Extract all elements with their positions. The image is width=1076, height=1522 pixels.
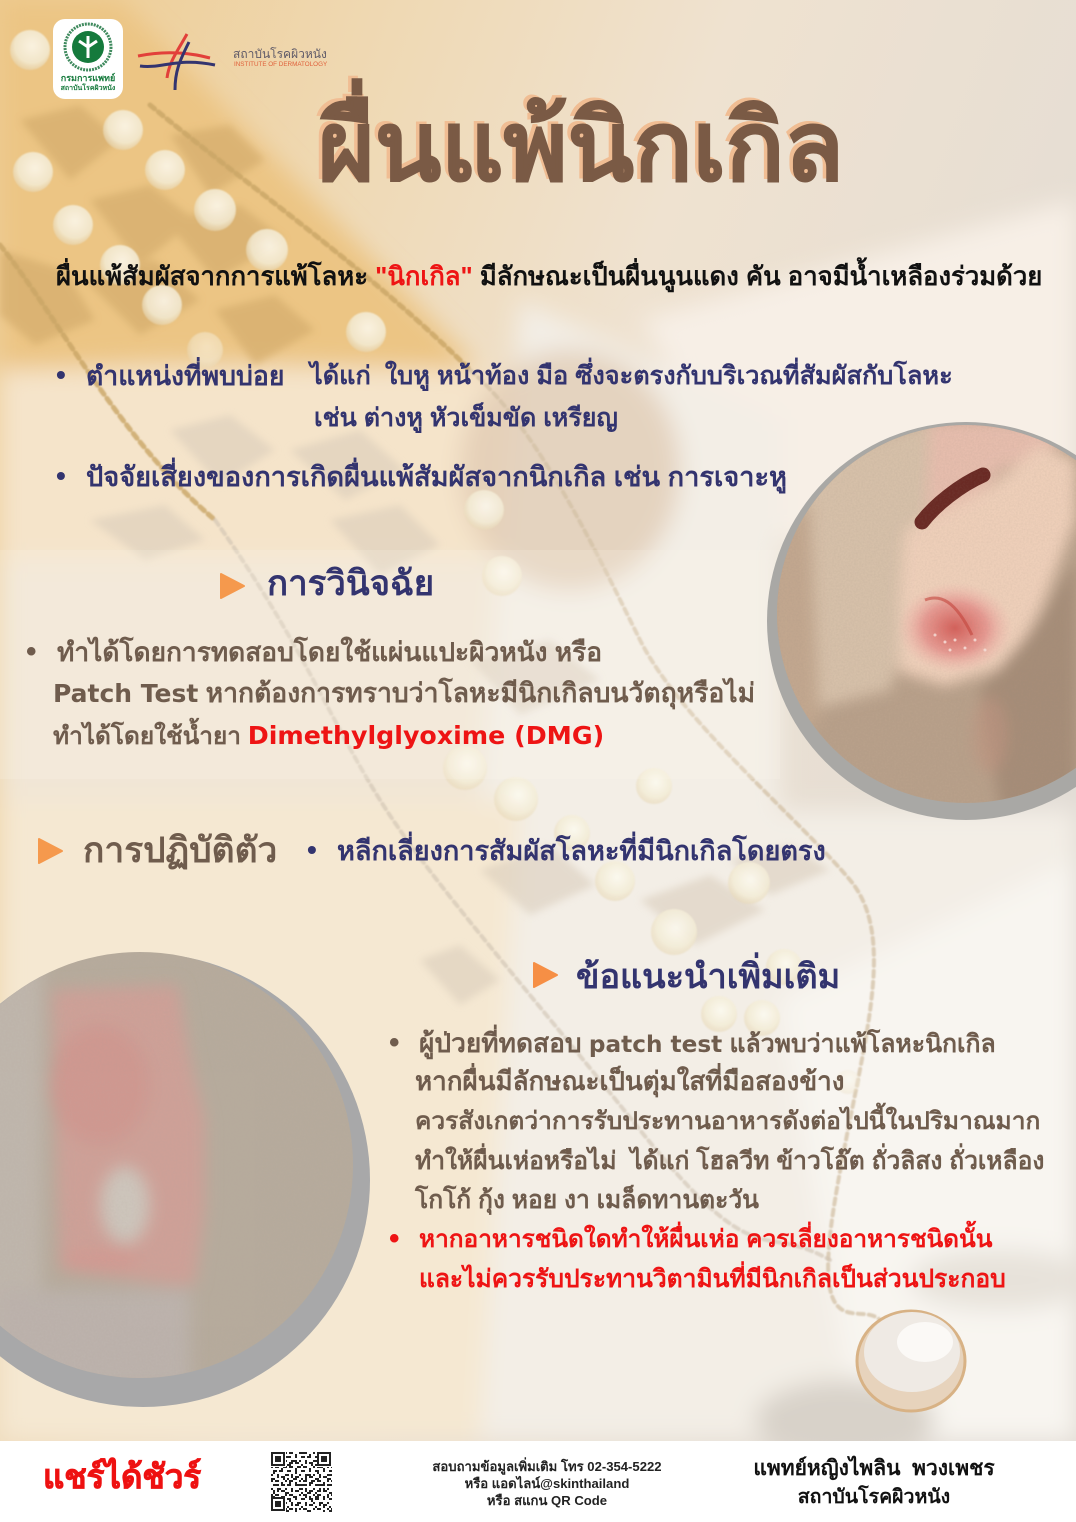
- bullet list: locations and risk factors: [56, 357, 953, 494]
- practice text: •: [307, 834, 317, 865]
- diagnosis panel band: [0, 550, 780, 779]
- photo: earlobe rash: [767, 422, 1076, 820]
- bullet list: locations and risk factors: •: [56, 460, 66, 491]
- pearls: [10, 30, 860, 1094]
- footer bar: [0, 1441, 1076, 1522]
- icon: arrow: [220, 573, 245, 599]
- bullet list: locations and risk factors: •: [56, 359, 66, 390]
- logo: department of medical services: สถาบันโรคผิวหนัง: [61, 85, 115, 92]
- heading: practice: การปฏิบัติตัว: [83, 831, 277, 870]
- share slogan: แชร์ได้ชัวร์: [43, 1458, 201, 1495]
- advice text: ผู้ป่วยที่ทดสอบ patch test แล้วพบว่าแพ้โลหะนิกเกิล: [419, 1028, 996, 1058]
- logo: institute of dermatology: สถาบันโรคผิวหนัง: [233, 47, 327, 61]
- diagnosis panel band: ทำได้โดยการทดสอบโดยใช้แผ่นแปะผิวหนัง หรือ: [57, 637, 602, 667]
- contact text: สอบถามข้อมูลเพิ่มเติม โทร 02-354-5222: [432, 1459, 662, 1474]
- advice text: หากอาหารชนิดใดทำให้ผื่นเห่อ ควรเลี่ยงอาหารชนิดนั้น: [419, 1226, 992, 1253]
- advice text: •: [389, 1026, 400, 1059]
- author: สถาบันโรคผิวหนัง: [798, 1486, 950, 1508]
- logo: institute of dermatology: INSTITUTE OF DERMATOLOGY: [234, 61, 327, 68]
- advice text: ทำให้ผื่นเห่อหรือไม่ ได้แก่ โฮลวีท ข้าวโอ๊ต ถั่วลิสง ถั่วเหลือง: [415, 1148, 1044, 1175]
- diagnosis panel band: Patch Test หากต้องการทราบว่าโลหะมีนิกเกิลบนวัตถุหรือไม่: [53, 678, 755, 708]
- title: ผื่นแพ้นิกเกิล: [318, 92, 844, 201]
- logo: institute of dermatology: [138, 33, 327, 90]
- icon: arrow advice: [533, 962, 558, 988]
- diagnosis panel band: ทำได้โดยใช้น้ำยา Dimethylglyoxime (DMG): [53, 721, 604, 750]
- contact text: หรือ แอดไลน์@skinthailand: [465, 1476, 629, 1491]
- heading: diagnosis: การวินิจฉัย: [267, 564, 434, 603]
- contact text: [432, 1457, 662, 1508]
- chains: [0, 105, 880, 1320]
- QR code: [271, 1452, 332, 1512]
- heading: additional advice: ข้อแนะนำเพิ่มเติม: [576, 958, 840, 996]
- author: แพทย์หญิงไพลิน พวงเพชร: [753, 1457, 995, 1480]
- advice text: •: [389, 1222, 400, 1255]
- author: [753, 1456, 995, 1508]
- bullet list: locations and risk factors: เช่น ต่างหู หัวเข็มขัด เหรียญ: [314, 404, 618, 432]
- practice text: หลีกเลี่ยงการสัมผัสโลหะที่มีนิกเกิลโดยตรง: [337, 835, 826, 866]
- bullet list: locations and risk factors: ได้แก่ ใบหู หน้าท้อง มือ ซึ่งจะตรงกับบริเวณที่สัมผัสกับโลหะ: [310, 362, 953, 390]
- advice text: หากผื่นมีลักษณะเป็นตุ่มใสที่มือสองข้าง: [415, 1066, 844, 1096]
- diagnosis text: •: [26, 635, 37, 668]
- logo: department of medical services: [53, 19, 123, 99]
- advice text: และไม่ควรรับประทานวิตามินที่มีนิกเกิลเป็นส่วนประกอบ: [419, 1266, 1006, 1293]
- icon: arrow practice: [38, 838, 63, 864]
- advice text: ควรสังเกตว่าการรับประทานอาหารดังต่อไปนี้ในปริมาณมาก: [415, 1108, 1040, 1135]
- pearl pendant: [857, 1311, 965, 1411]
- shadows of pearls: [0, 105, 315, 365]
- bullet list: locations and risk factors: ตำแหน่งที่พบบ่อย: [86, 361, 284, 391]
- advice text: [389, 1024, 1044, 1293]
- intro text: ผื่นแพ้สัมผัสจากการแพ้โลหะ "นิกเกิล" มีลักษณะเป็นผื่นนูนแดง คัน อาจมีน้ำเหลืองร่วมด้วย: [56, 263, 1042, 291]
- logo: department of medical services: กรมการแพทย์: [61, 73, 115, 83]
- bullet list: locations and risk factors: ปัจจัยเสี่ยงของการเกิดผื่นแพ้สัมผัสจากนิกเกิล เช่น การเจาะหู: [86, 461, 787, 492]
- advice text: โกโก้ กุ้ง หอย งา เมล็ดทานตะวัน: [415, 1187, 759, 1214]
- photo: forearm patch test rash: [0, 952, 370, 1407]
- contact text: หรือ สแกน QR Code: [487, 1493, 607, 1508]
